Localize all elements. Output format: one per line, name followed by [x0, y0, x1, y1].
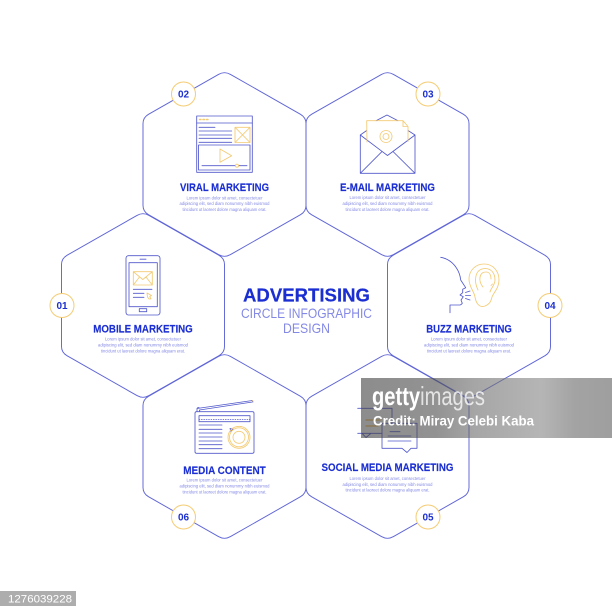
panel: e-mail marketing: [306, 73, 469, 256]
body text: tincidunt ut laoreet dolore magna aliquam erat.: [427, 348, 511, 354]
body text: Lorem ipsum dolor sit amet, consectetuer: [350, 476, 426, 481]
badge 03: [416, 82, 440, 106]
icon: open envelope with letter: [360, 115, 415, 173]
subtitle: CIRCLE INFOGRAPHIC: [241, 305, 372, 321]
body text: adipiscing elit, sed diam nonummy nibh euismod: [424, 342, 514, 348]
body text: adipiscing elit, sed diam nonummy nibh euismod: [342, 201, 433, 206]
body text: tincidunt ut laoreet dolore magna aliquam erat.: [346, 488, 430, 493]
icon: browser window with video: [197, 116, 252, 172]
body text: [180, 195, 270, 212]
heading: social media marketing: SOCIAL MEDIA MARKETING: [322, 462, 454, 474]
watermark: gettyimages credit: Credit: Miray Celebi Kaba: [373, 413, 534, 429]
panel: media content: [143, 355, 306, 538]
body text: tincidunt ut laoreet dolore magna aliquam erat.: [346, 207, 430, 212]
badge 05: [416, 505, 440, 529]
hexagon outline 04: [388, 214, 550, 397]
body text: adipiscing elit, sed diam nonummy nibh euismod: [180, 484, 270, 488]
heading: media content: MEDIA CONTENT: [183, 465, 266, 477]
body text: [98, 336, 188, 354]
panel: mobile marketing: [50, 214, 224, 397]
body text: adipiscing elit, sed diam nonummy nibh euismod: [180, 201, 270, 206]
badge 06: 06: [178, 513, 189, 524]
badge 04: [538, 294, 562, 318]
hexagon outline 06: [143, 355, 306, 538]
watermark: gettyimages credit: gettyimages: [372, 381, 485, 411]
heading: mobile marketing: MOBILE MARKETING: [93, 323, 193, 335]
body text: [342, 195, 433, 212]
body text: adipiscing elit, sed diam nonummy nibh euismod: [342, 482, 433, 487]
body text: [342, 476, 433, 493]
body text: [180, 478, 270, 494]
image id tag: 1276039228: [8, 593, 72, 605]
subtitle: [241, 305, 372, 336]
body text: [424, 336, 514, 354]
icon: smartphone with mail: [126, 256, 160, 315]
subtitle: DESIGN: [283, 320, 330, 336]
body text: Lorem ipsum dolor sit amet, consectetuer: [431, 336, 507, 342]
icon: chat bubbles: [358, 408, 417, 452]
body text: Lorem ipsum dolor sit amet, consectetuer: [186, 195, 263, 200]
badge 02: 02: [178, 90, 189, 101]
body text: Lorem ipsum dolor sit amet, consectetuer: [186, 478, 263, 482]
heading: e-mail marketing: E-MAIL MARKETING: [340, 182, 435, 194]
hexagon outline 05: [306, 355, 469, 538]
badge 03: 03: [422, 90, 434, 101]
hexagon outline 03: [306, 73, 469, 256]
heading: buzz marketing: BUZZ MARKETING: [426, 323, 512, 335]
panel: central hexagon title: [241, 285, 372, 336]
hexagon outline 02: [143, 73, 306, 256]
badge 02: [172, 82, 196, 106]
badge 05: 05: [422, 513, 434, 524]
body text: tincidunt ut laoreet dolore magna aliquam erat.: [101, 348, 185, 354]
panel: social media marketing: [306, 355, 469, 538]
badge 06: [172, 505, 196, 529]
watermark: gettyimages credit: [361, 378, 612, 438]
body text: Lorem ipsum dolor sit amet, consectetuer: [105, 336, 181, 342]
heading: advertising: ADVERTISING: [243, 285, 370, 306]
body text: Lorem ipsum dolor sit amet, consectetuer: [350, 195, 426, 200]
hexagon outline 01: [62, 214, 224, 397]
badge 01: [50, 294, 74, 318]
panel: buzz marketing: [388, 214, 562, 397]
icon: speaking head and ear: [441, 257, 499, 313]
icon: radio: [195, 400, 254, 453]
body text: adipiscing elit, sed diam nonummy nibh euismod: [98, 342, 188, 348]
body text: tincidunt ut laoreet dolore magna aliquam erat.: [182, 207, 266, 212]
heading: viral marketing: VIRAL MARKETING: [180, 182, 269, 194]
badge 01: 01: [56, 301, 68, 312]
body text: tincidunt ut laoreet dolore magna aliquam erat.: [182, 490, 266, 494]
panel: viral marketing: [143, 73, 306, 256]
image id tag: [0, 591, 76, 606]
badge 04: 04: [544, 301, 556, 312]
